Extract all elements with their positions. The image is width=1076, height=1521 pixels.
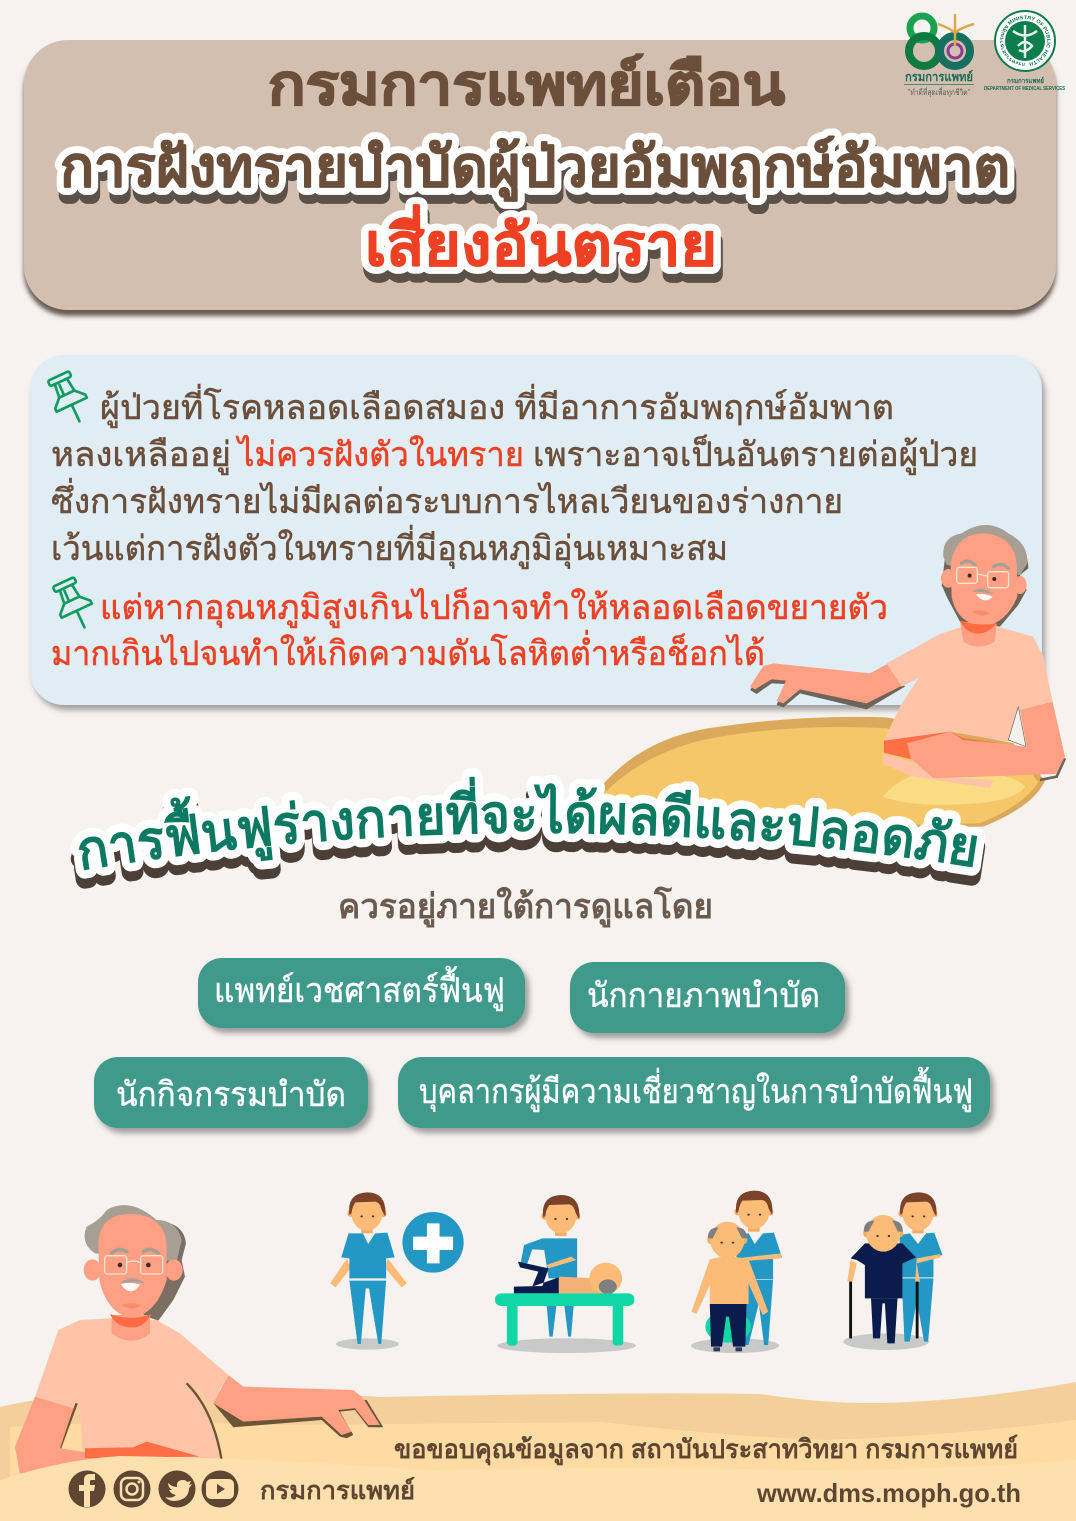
man's right arm [213,1375,383,1438]
curved heading: rehabilitation for good and safe results: การฟื้นฟูร่างกายที่จะได้ผลดีและปลอดภัย [78,776,978,870]
text block: stroke patient advice [51,384,978,569]
man's head [84,1205,186,1321]
therapist supporting elderly patient with canes [843,1192,942,1350]
icon: twitter [158,1470,196,1508]
therapist and patient on table [495,1195,636,1353]
curved heading: rehabilitation for good and safe results: การฟื้นฟูร่างกายที่จะได้ผลดีและปลอดภัย [70,768,985,879]
icon: youtube [202,1470,238,1508]
icon: push pin 2 [48,575,100,634]
neck [960,622,997,647]
button: rehabilitation specialists [398,1057,990,1128]
button: rehabilitation physician [198,958,525,1028]
text block: high temperature warning: มากเกินไปจนทำให้เกิดความดันโลหิตต่ำหรือช็อกได้ [51,630,765,673]
heading: sand burial therapy for stroke patients: การฝังทรายบำบัดผู้ป่วยอัมพฤกษ์อัมพาต [60,135,1010,202]
info panel background [30,355,1042,705]
nurse with medical cross [330,1192,464,1350]
heading: dangerous: เสี่ยงอันตราย [365,204,717,278]
website: www.dms.moph.go.th [756,1478,1021,1508]
text block: stroke patient advice: เพราะอาจเป็นอันตรายต่อผู้ป่วย [533,434,978,475]
text block: stroke patient advice: เว้นแต่การฝังตัวในทรายที่มีอุณหภูมิอุ่นเหมาะสม [51,525,728,569]
shirt hem and waist [883,732,1008,788]
man's left arm [750,663,905,709]
button: rehabilitation specialists: บุคลากรผู้มีความเชี่ยวชาญในการบำบัดฟื้นฟู [419,1067,973,1112]
collar shadow [110,1314,152,1327]
text block: stroke patient advice: ไม่ควรฝังตัวในทราย [235,435,524,474]
icon: facebook [68,1470,106,1508]
illustration: elderly man buried in sand mound [588,525,1065,830]
man's right arm [907,702,1065,780]
illustration: care staff row [330,1191,942,1353]
sand foreground layer [0,1456,1076,1521]
credit line: ขอขอบคุณข้อมูลจาก สถาบันประสาทวิทยา กรมการแพทย์ [394,1434,1018,1466]
sand mound [588,717,1045,830]
therapist with seated elderly patient [691,1191,782,1353]
heading: dangerous: เสี่ยงอันตราย [367,213,719,287]
subheading: ควรอยู่ภายใต้การดูแลโดย [338,886,713,928]
logo: ministry of public health seal [984,10,1065,92]
man's shirt [35,1318,228,1460]
waist fold [85,1442,200,1458]
heading: sand burial therapy for stroke patients: การฝังทรายบำบัดผู้ป่วยอัมพฤกษ์อัมพาต [60,135,1010,202]
logo: 80 years department of medical services: กรมการแพทย์ [905,70,973,84]
heading: dangerous: เสี่ยงอันตราย [365,204,717,278]
heading: department warns: กรมการแพทย์เตือน [268,53,785,116]
gap between arm and torso [1008,707,1026,747]
curved heading: rehabilitation for good and safe results: การฟื้นฟูร่างกายที่จะได้ผลดีและปลอดภัย [70,790,986,889]
icon: instagram [114,1470,150,1508]
illustration: elderly man in sand, bottom left [15,1205,383,1475]
man's head [941,525,1028,627]
text block: stroke patient advice: ผู้ป่วยที่โรคหลอดเลือดสมอง ที่มีอาการอัมพฤกษ์อัมพาต [100,384,894,428]
man's left arm [15,1397,113,1475]
header background [24,40,1056,310]
info panel [30,355,1042,705]
logo: ministry of public health seal: กระทรวงสาธารณสุข MINISTRY OF PUBLIC HEALTH [1000,16,1050,66]
logo: 80 years department of medical services: "ทำดีที่สุดเพื่อทุกชีวิต" [908,86,970,97]
man's shirt [883,627,1053,742]
heading: sand burial therapy for stroke patients: การฝังทรายบำบัดผู้ป่วยอัมพฤกษ์อัมพาต [62,144,1012,211]
button: occupational therapist: นักกิจกรรมบำบัด [116,1076,346,1114]
shirt side shadows [60,1383,222,1460]
text block: high temperature warning: แต่หากอุณหภูมิสูงเกินไปก็อาจทำให้หลอดเลือดขยายตัว [100,587,888,628]
logo: ministry of public health seal: กรมการแพทย์ [1007,76,1044,85]
text block: high temperature warning [51,587,888,673]
button: physical therapist: นักกายภาพบำบัด [587,977,820,1015]
button: physical therapist [570,962,845,1033]
text block: stroke patient advice: ซึ่งการฝังทรายไม่มีผลต่อระบบการไหลเวียนของร่างกาย [51,478,843,521]
social icons [68,1470,238,1508]
button: occupational therapist [94,1057,368,1128]
icon: push pin 1 [43,369,95,428]
header panel [24,40,1056,310]
social handle: กรมการแพทย์ [260,1476,415,1505]
text block: stroke patient advice: หลงเหลืออยู่ [51,436,231,475]
button: rehabilitation physician: แพทย์เวชศาสตร์ฟื้นฟู [214,966,505,1011]
sand middle layer [10,1420,1076,1521]
logo: 80 years department of medical services [904,14,974,97]
collar shadow [960,621,997,634]
neck [112,1315,150,1341]
sand background layer [0,1382,1076,1521]
